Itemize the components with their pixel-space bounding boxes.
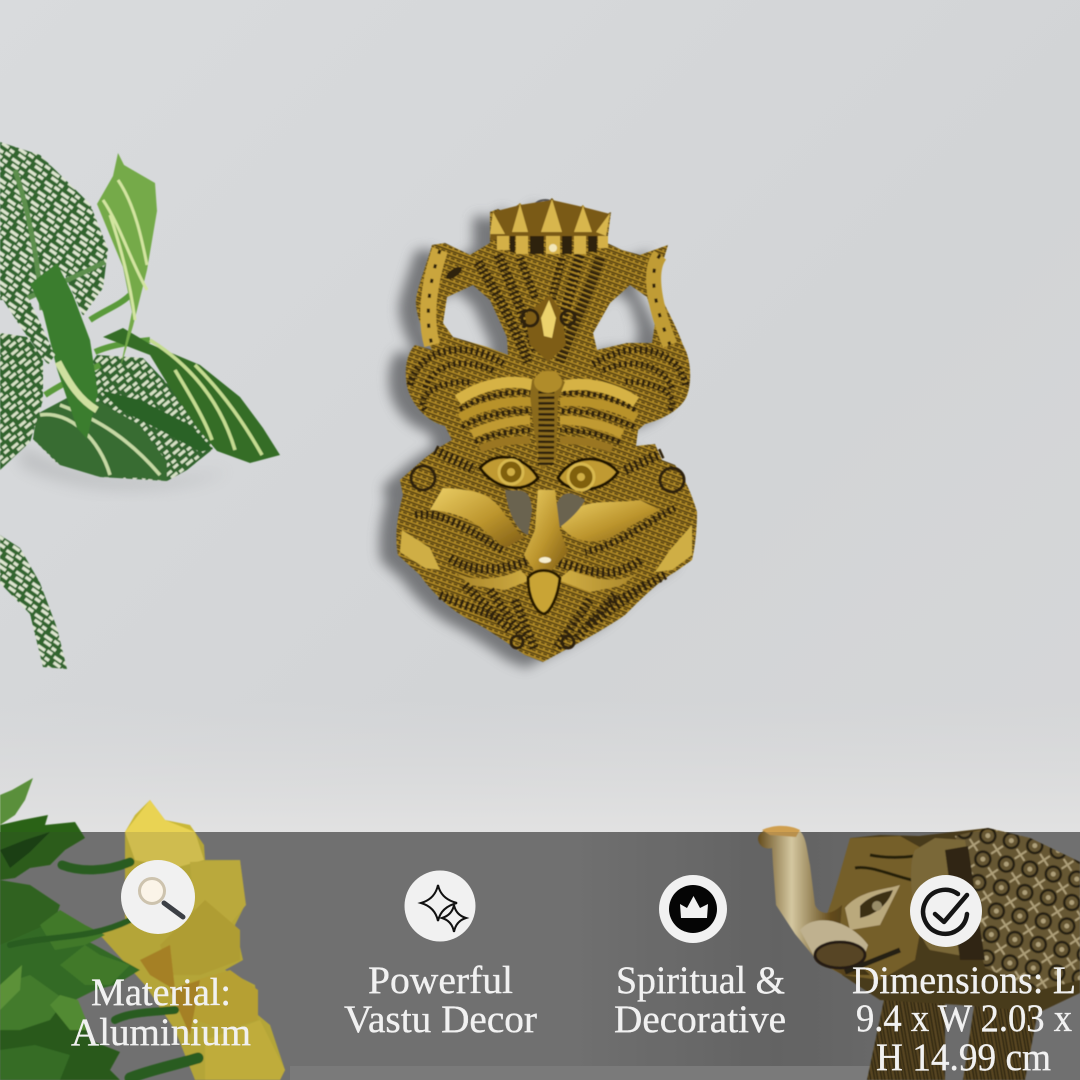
leaf: lower band: [100, 390, 213, 452]
left moustache: [430, 488, 525, 548]
feature: spiritual: [614, 875, 786, 1041]
brass Narasimha vastu mask: [396, 198, 697, 662]
label: [614, 959, 786, 1041]
label: Powerful: [368, 959, 513, 1002]
label: 9.4 x W 2.03 x: [856, 997, 1072, 1040]
moustache ridges: [415, 508, 675, 572]
left eye: [480, 457, 538, 488]
feature bar background: [0, 832, 1080, 1080]
leaf: top sprig: [0, 778, 33, 825]
label: Decorative: [614, 998, 786, 1041]
upper left plant: [0, 142, 280, 481]
gold jaws: [455, 570, 640, 592]
right eye: [558, 459, 618, 490]
back legs: [963, 1000, 1040, 1080]
serpent heads crown: [490, 199, 610, 254]
trunk: [758, 826, 870, 975]
label: Spiritual &: [616, 959, 785, 1002]
snake arms: [428, 250, 670, 345]
hanging wire: [530, 200, 562, 212]
leaf: right striped: [103, 328, 280, 463]
leaf vein: [15, 170, 105, 310]
wall shadow behind upper plant: [20, 445, 230, 488]
icon: sparkles: [404, 870, 476, 942]
feature: dimensions: [852, 875, 1076, 1079]
label: Aluminium: [71, 1011, 251, 1054]
yellow flowers: [100, 800, 285, 1080]
Ganesha figure: [522, 295, 575, 362]
body: [842, 828, 1080, 1012]
feature: material: [71, 860, 251, 1054]
nose: [524, 490, 568, 570]
icon: crown: [659, 875, 727, 943]
bright corners: [400, 525, 692, 572]
leaf: left upper mottled: [0, 218, 55, 365]
front leg: [867, 985, 945, 1080]
head: [815, 836, 925, 980]
beard fan: [440, 575, 665, 650]
leaf: central dark: [30, 263, 98, 439]
label: [71, 971, 251, 1054]
right moustache: [560, 500, 660, 542]
feature: vastu decor: [344, 870, 537, 1041]
label: H 14.99 cm: [876, 1036, 1051, 1079]
leaf: bright green curled: [97, 153, 157, 369]
ear: [911, 838, 985, 960]
leaf: large mottled rear: [0, 142, 108, 316]
label: Dimensions: L: [852, 959, 1076, 1002]
central cobra: [530, 368, 565, 470]
lower left leaf: [0, 535, 67, 669]
fangs and curls: [411, 450, 684, 492]
stems: [45, 295, 150, 395]
label: [852, 959, 1076, 1079]
tongue: [528, 570, 560, 614]
leaf: left mottled: [0, 333, 43, 470]
snake hoods: [478, 255, 600, 362]
leaf: dark striped foreground: [33, 398, 167, 481]
label: [344, 959, 537, 1041]
icon: check mark: [910, 875, 982, 947]
bottom left green plant: [0, 778, 285, 1080]
label: Material:: [91, 971, 231, 1014]
brass elephant figurine: [758, 826, 1080, 1080]
leaf: mottled rear low: [33, 355, 213, 481]
speckled cheeks: [505, 490, 585, 535]
dimming overlay of feature bar: [0, 832, 1080, 1080]
stems: [10, 862, 198, 1078]
ornate saddle: [955, 828, 1080, 990]
green leaves: [0, 815, 140, 1080]
icon: magnifying glass: [121, 860, 195, 934]
side coils: [410, 350, 686, 410]
brow bands: [458, 382, 636, 449]
wall mask shadow: [379, 204, 680, 668]
label: Vastu Decor: [344, 998, 537, 1041]
mask body: [396, 198, 697, 662]
